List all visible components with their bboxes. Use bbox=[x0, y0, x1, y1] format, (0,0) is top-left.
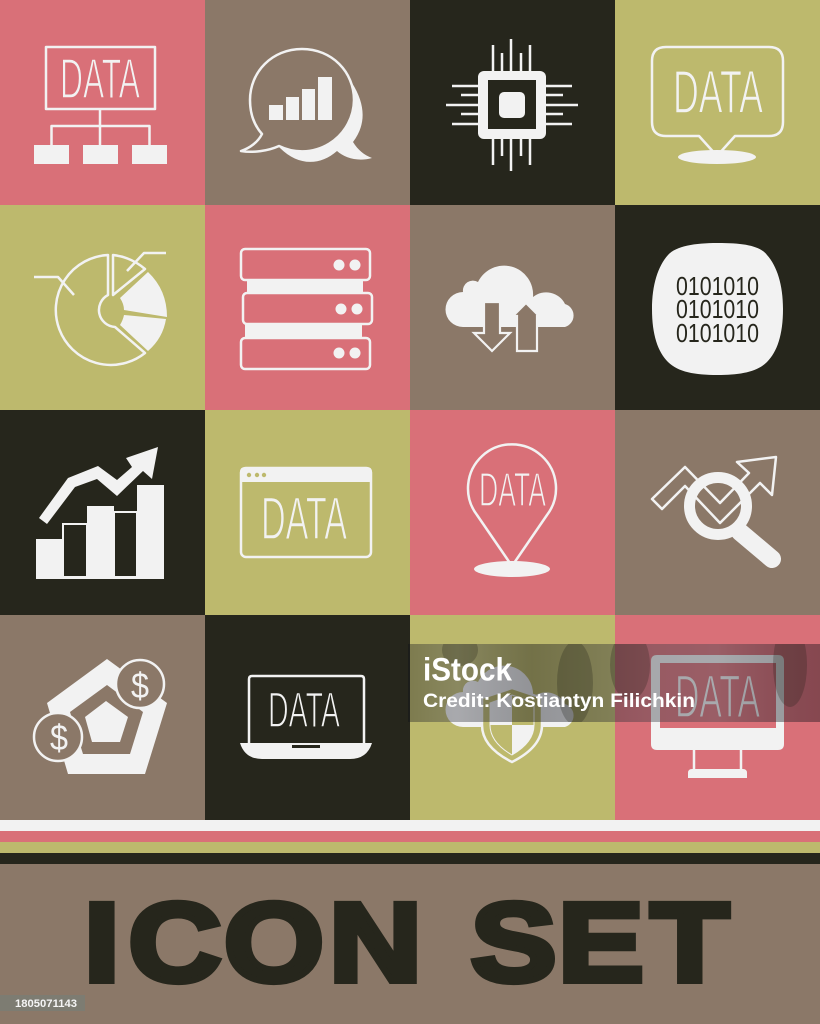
icon: map pin with data: DATA bbox=[479, 464, 546, 517]
icon: cloud upload and download bbox=[446, 266, 574, 351]
colour stripes bbox=[0, 820, 820, 864]
icon: pie chart bbox=[34, 253, 167, 365]
icon: binary code squircle: 0101010 bbox=[676, 318, 759, 348]
watermark logo: iStock bbox=[423, 652, 512, 688]
icon: data speech bubble pin bbox=[652, 47, 783, 164]
watermark credit: Credit: Kostiantyn Filichkin bbox=[423, 691, 695, 712]
icon: binary code squircle bbox=[652, 243, 783, 375]
icon: desktop monitor with data bbox=[651, 655, 784, 778]
icon: laptop with data bbox=[240, 676, 372, 759]
heading: icon set: ICON SET bbox=[84, 880, 729, 1005]
icon: chat bubble with bars bbox=[241, 49, 372, 162]
icon: pentagon with dollar coins: $ bbox=[131, 665, 149, 706]
icon: pentagon with dollar coins bbox=[34, 659, 167, 774]
icon: microchip bbox=[446, 39, 578, 171]
icon: magnifier over trend arrow bbox=[652, 457, 776, 559]
icon: browser window with data: DATA bbox=[261, 485, 347, 552]
watermark band bbox=[408, 644, 820, 722]
image id label bbox=[0, 995, 85, 1011]
icon: pentagon with dollar coins: $ bbox=[50, 717, 68, 758]
icon: binary code squircle: 0101010 bbox=[676, 271, 759, 301]
icon: binary code squircle: 0101010 bbox=[676, 294, 759, 324]
icon: growth bar chart with arrow bbox=[36, 447, 164, 579]
icon: laptop with data: DATA bbox=[268, 682, 340, 738]
icon: data hierarchy: DATA bbox=[60, 47, 140, 111]
icon: browser window with data bbox=[240, 467, 372, 557]
icon: data hierarchy bbox=[34, 47, 167, 164]
icon: cloud with shield bbox=[446, 666, 574, 762]
icon: map pin with data bbox=[468, 444, 556, 577]
icon: server rack bbox=[241, 249, 372, 369]
image id label: 1805071143 bbox=[15, 998, 77, 1010]
